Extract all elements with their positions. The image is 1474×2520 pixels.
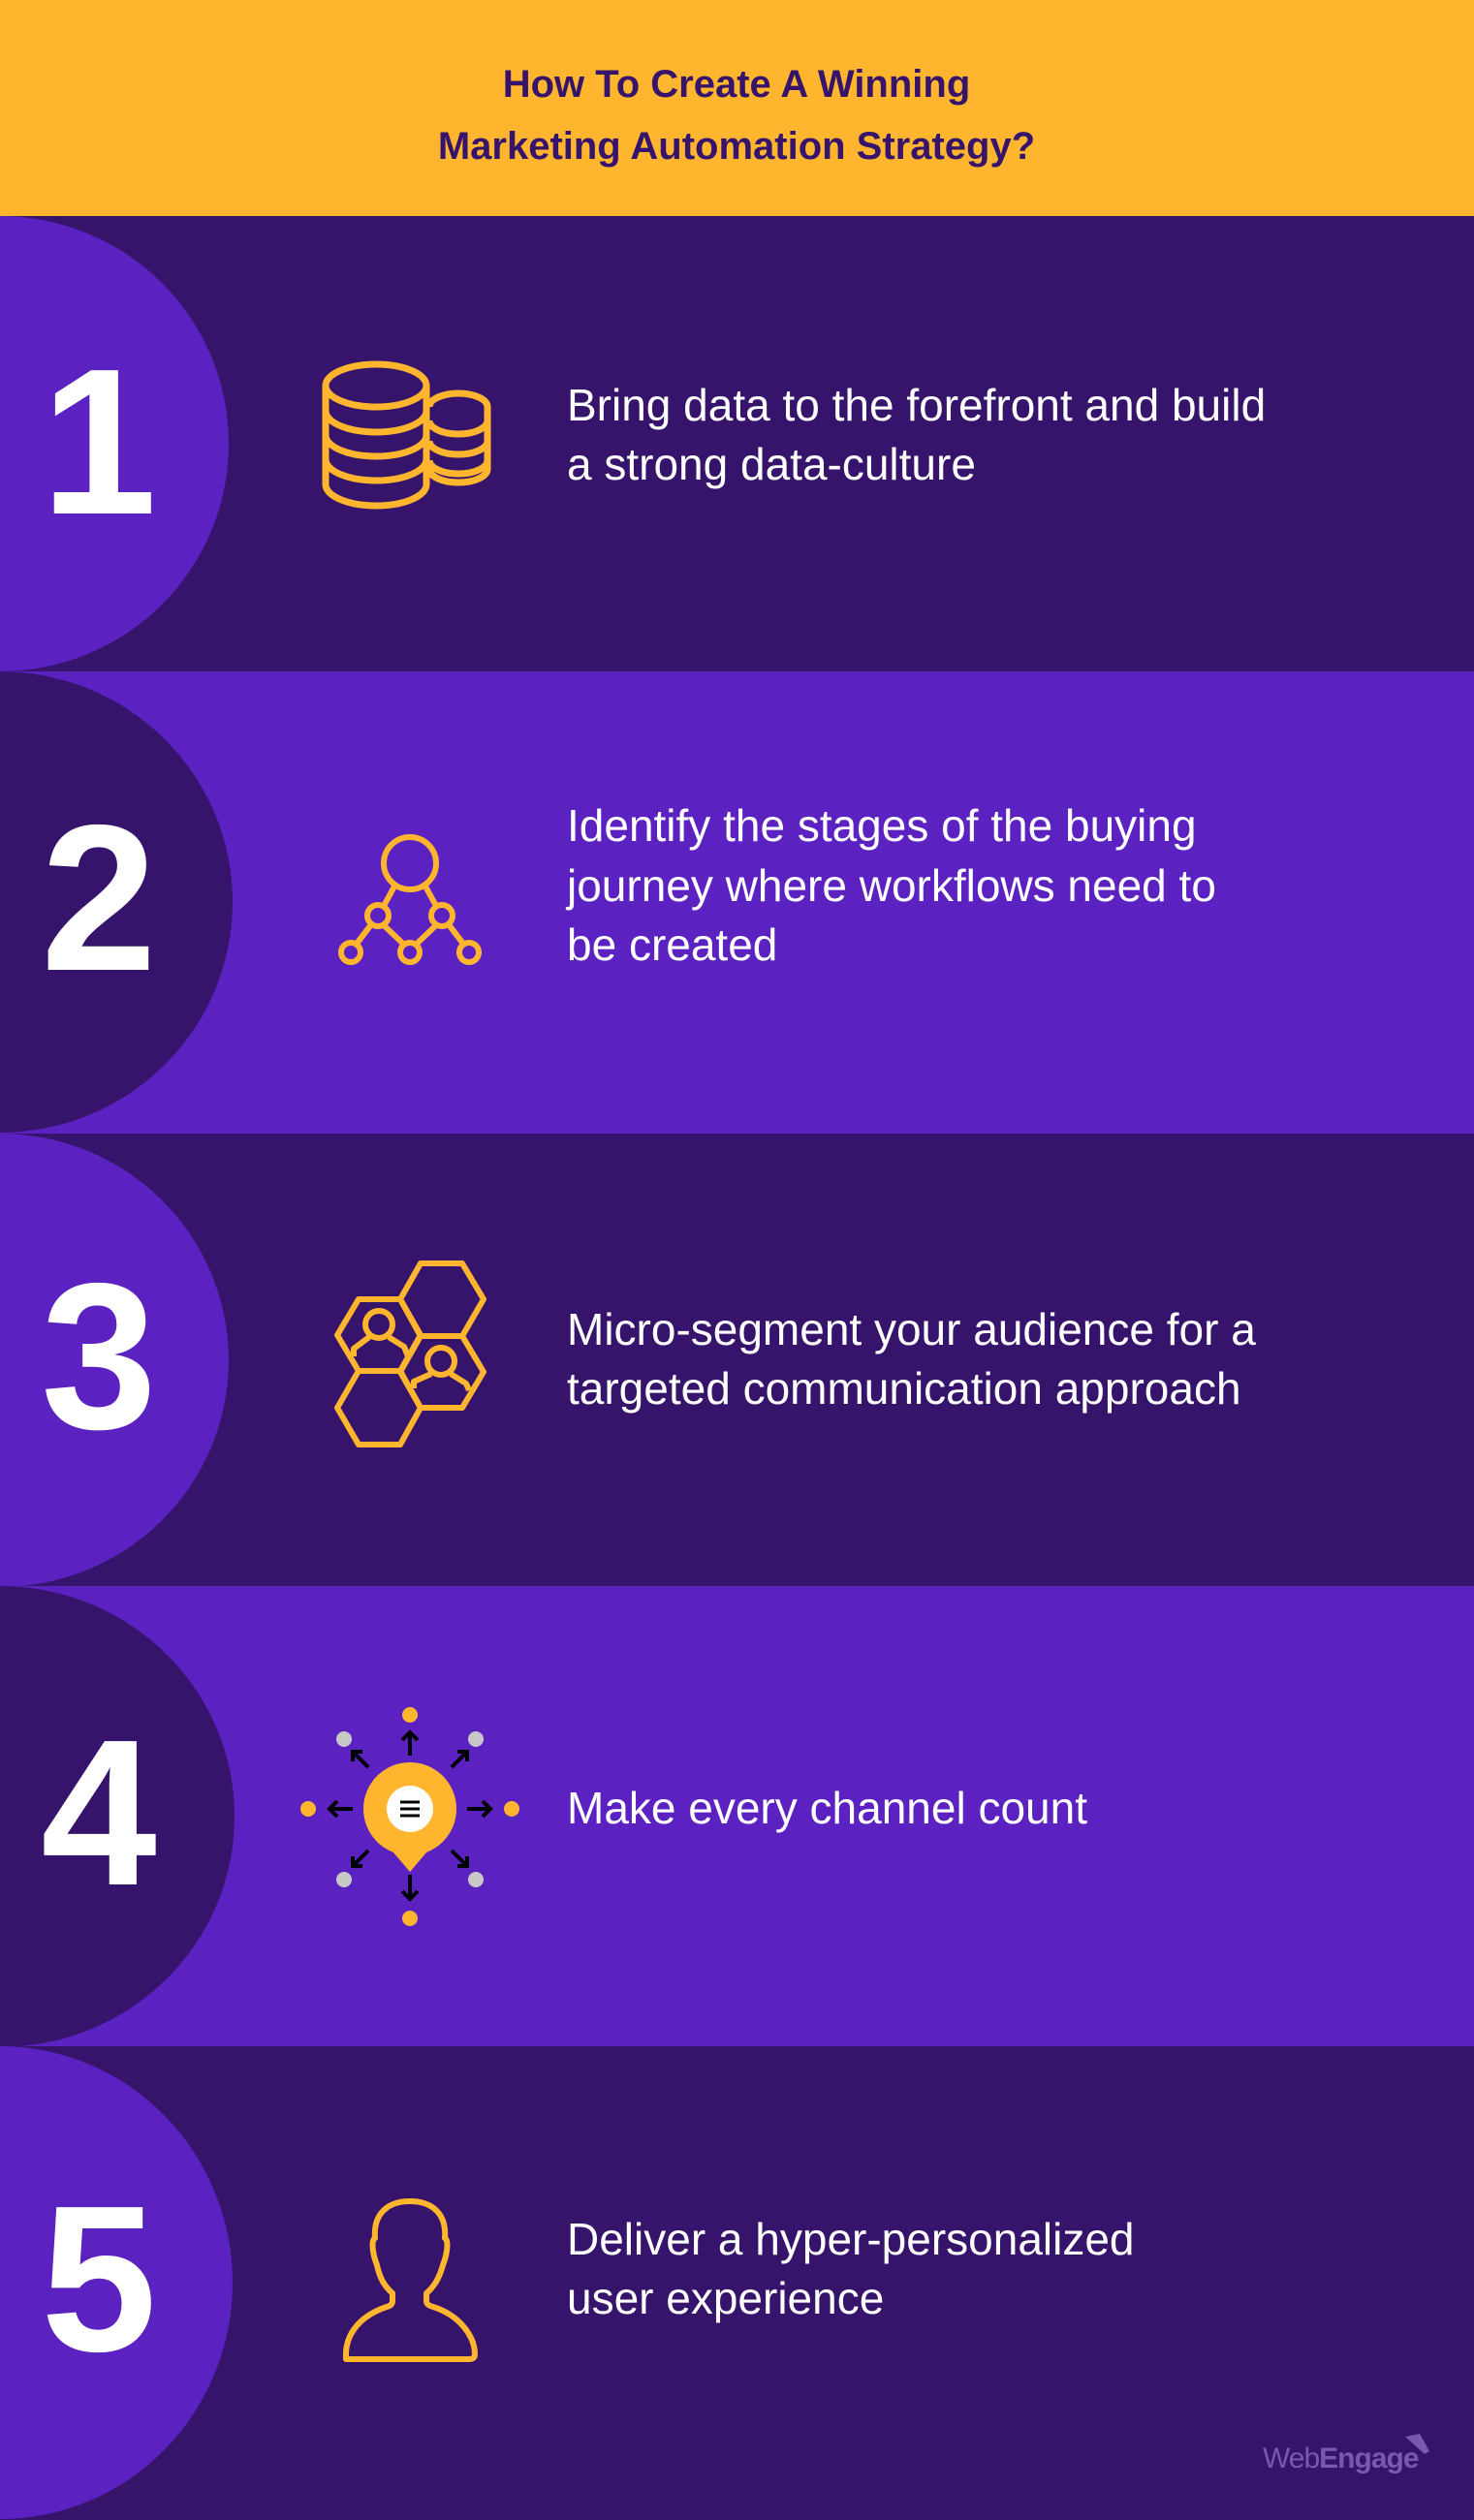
text 3: Micro-segment your audience for a (567, 1304, 1256, 1354)
panel: step 3: targeted communication approach (567, 1363, 1241, 1414)
panel: step 1: a strong data-culture (567, 439, 976, 489)
icon: user (346, 2201, 475, 2359)
text 1: Bring data to the forefront and build (567, 380, 1266, 430)
panel: step 2: be created (567, 919, 777, 970)
panel: step 3 (0, 1134, 1474, 1587)
number 4: 4 (41, 1696, 157, 1929)
text 2: Identify the stages of the buying (567, 800, 1197, 851)
panel: step 5: user experience (567, 2273, 884, 2323)
icon: hierarchy (341, 837, 479, 962)
number 5: 5 (41, 2162, 157, 2395)
panel: step 2 (0, 671, 1474, 1134)
text 4: Make every channel count (567, 1783, 1087, 1833)
number 1: 1 (41, 325, 157, 558)
panel: step 1 (0, 216, 1474, 671)
icon: database (326, 364, 487, 506)
title line 2: Marketing Automation Strategy? (438, 125, 1035, 168)
icon: hexagon segments (337, 1263, 484, 1445)
panel: step 4 (0, 1586, 1474, 2047)
icon: channels (300, 1707, 519, 1926)
panel: step 2: journey where workflows need to (565, 860, 1216, 911)
panel: step 5 (0, 2046, 1474, 2520)
number 2: 2 (41, 781, 157, 1014)
logo: WebEngage: WebEngage (1263, 2442, 1419, 2474)
header (0, 0, 1474, 216)
text 5: Deliver a hyper-personalized (567, 2214, 1135, 2264)
title: How To Create A Winning (503, 63, 970, 106)
number 3: 3 (41, 1239, 157, 1473)
